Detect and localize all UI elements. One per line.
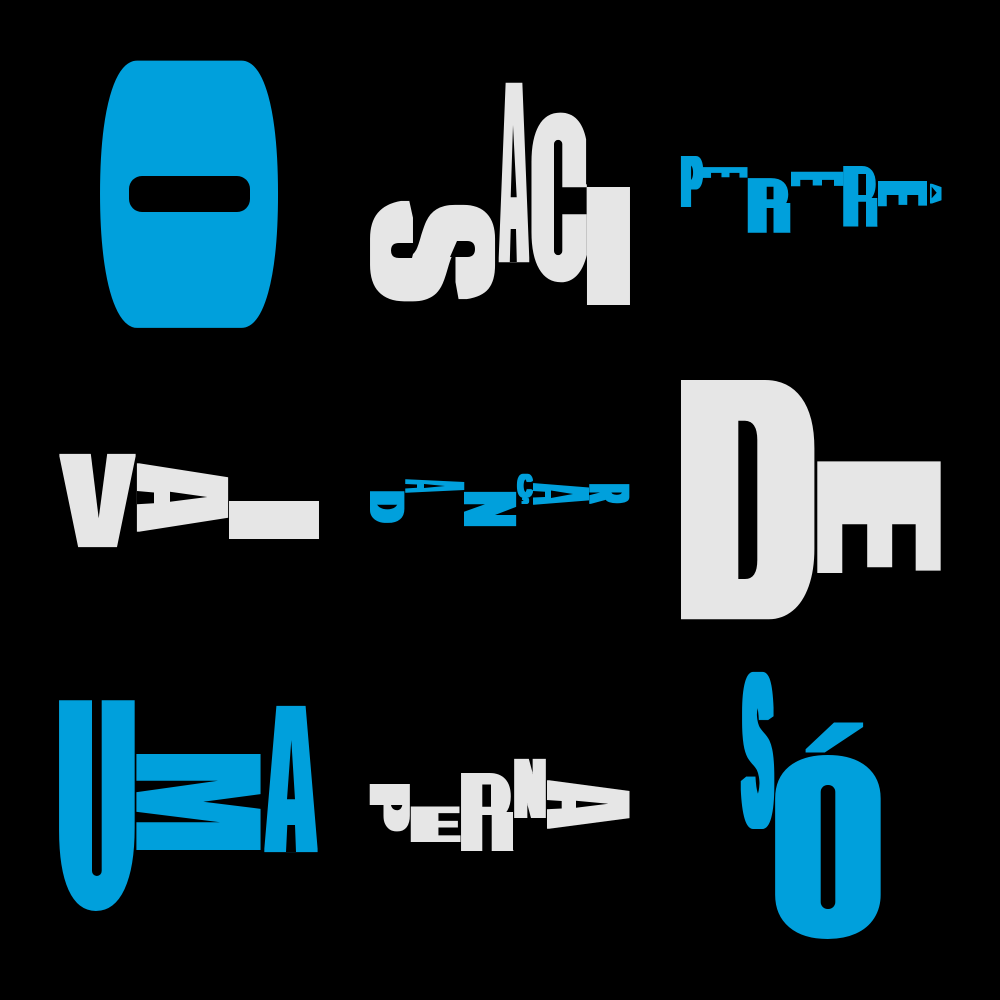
letter N: N [449,494,532,524]
letter C counter [554,140,586,255]
letter A: A [274,663,308,896]
letter E: E [775,174,857,184]
word: VAI [73,426,347,574]
letter A counters [286,740,296,852]
letter N wedges [464,504,516,515]
word: PERNA [358,741,654,876]
letter M: M [98,751,299,853]
word: O [129,45,250,344]
letter A: A [504,31,524,315]
letter D counter [738,421,757,579]
letter A counters [546,800,608,809]
letter N: N [516,741,545,835]
letter R leg [866,198,877,227]
word: DE [697,386,973,613]
letter E: E [417,796,453,852]
letter U: U [52,636,142,973]
letter R openings [482,784,492,852]
letter R: R [455,749,515,876]
letter Ê: Ê [863,184,943,202]
word: DANÇAR [359,468,639,524]
letter O body: O [131,45,248,344]
letter A counters [510,125,517,262]
letter R leg [491,812,513,851]
letter Ó accent: Ó [735,720,915,960]
letter Ó body: O [769,778,887,917]
letter E: E [783,476,973,555]
letter S: S [744,634,771,869]
letter A: A [109,477,254,518]
letter Ç: Ç [518,468,532,504]
letter R leg [774,203,790,232]
letter M wedges [136,781,262,822]
letter Ó counter [821,785,835,909]
letter I: I [201,483,347,557]
letter V: V [73,426,122,574]
letter D: D [359,493,413,521]
word: SÓ [740,672,881,939]
letter A: A [516,488,604,500]
letter A: A [387,482,481,490]
letter R: R [743,161,792,249]
letter D: D [697,386,795,613]
letter A: A [523,789,654,820]
word: SACI [341,31,650,342]
letter P: P [358,786,422,827]
letter A counters [405,484,445,488]
letter C: C [528,119,589,276]
letter S slots [391,241,475,258]
letter R openings [767,187,774,233]
letter A counters [137,491,207,504]
letter S: S [341,210,525,293]
word: PERERÊ [682,141,943,249]
letter O counter [129,176,250,212]
letter I: I [567,150,650,342]
letter V notch [91,453,107,518]
letter R openings [858,174,866,228]
letter P: P [682,141,701,222]
letter R: R [840,147,879,246]
circumflex notch [932,187,937,198]
letter E: E [690,168,760,176]
letter A counters [533,490,573,498]
letter R: R [576,485,639,502]
word: UMA [52,636,308,973]
letter U counter [92,700,102,876]
